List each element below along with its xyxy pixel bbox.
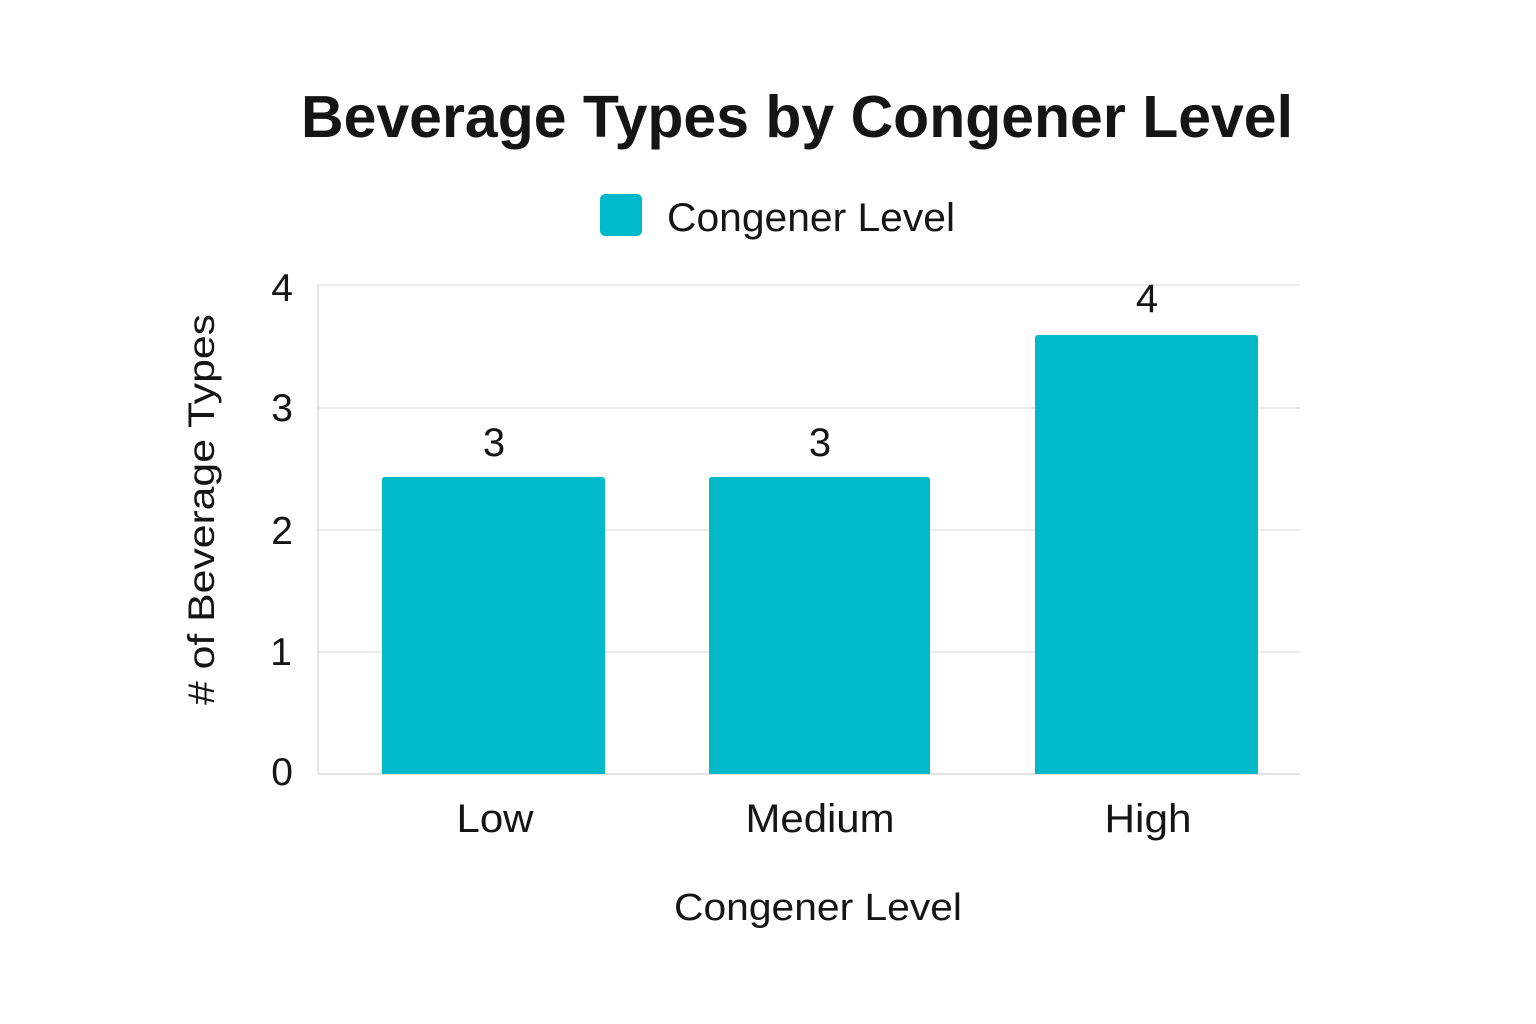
value labels: 3 xyxy=(483,421,505,465)
x axis category labels xyxy=(456,797,1192,841)
value labels: 3 xyxy=(809,421,831,465)
y axis tick labels: 1 xyxy=(270,631,292,674)
y axis title: # of Beverage Types xyxy=(181,314,222,705)
x axis category labels: High xyxy=(1104,797,1192,841)
y axis tick labels: 3 xyxy=(271,387,293,430)
bar: Medium xyxy=(709,477,930,774)
title: Beverage Types by Congener Level xyxy=(301,84,1293,150)
x axis category labels: Medium xyxy=(746,797,894,841)
legend swatch xyxy=(600,194,642,236)
x axis title: Congener Level xyxy=(674,887,962,929)
bar: High xyxy=(1035,335,1258,774)
value labels: 4 xyxy=(1136,277,1158,321)
y axis tick labels: 2 xyxy=(271,510,293,553)
legend xyxy=(600,194,955,240)
x axis category labels: Low xyxy=(456,797,534,841)
bars xyxy=(382,335,1258,774)
y axis tick labels: 4 xyxy=(271,267,293,310)
legend label: Congener Level xyxy=(667,196,955,240)
bar: Low xyxy=(382,477,605,774)
y axis tick labels: 0 xyxy=(271,751,293,794)
value labels xyxy=(483,277,1158,465)
y axis tick labels xyxy=(270,267,293,794)
